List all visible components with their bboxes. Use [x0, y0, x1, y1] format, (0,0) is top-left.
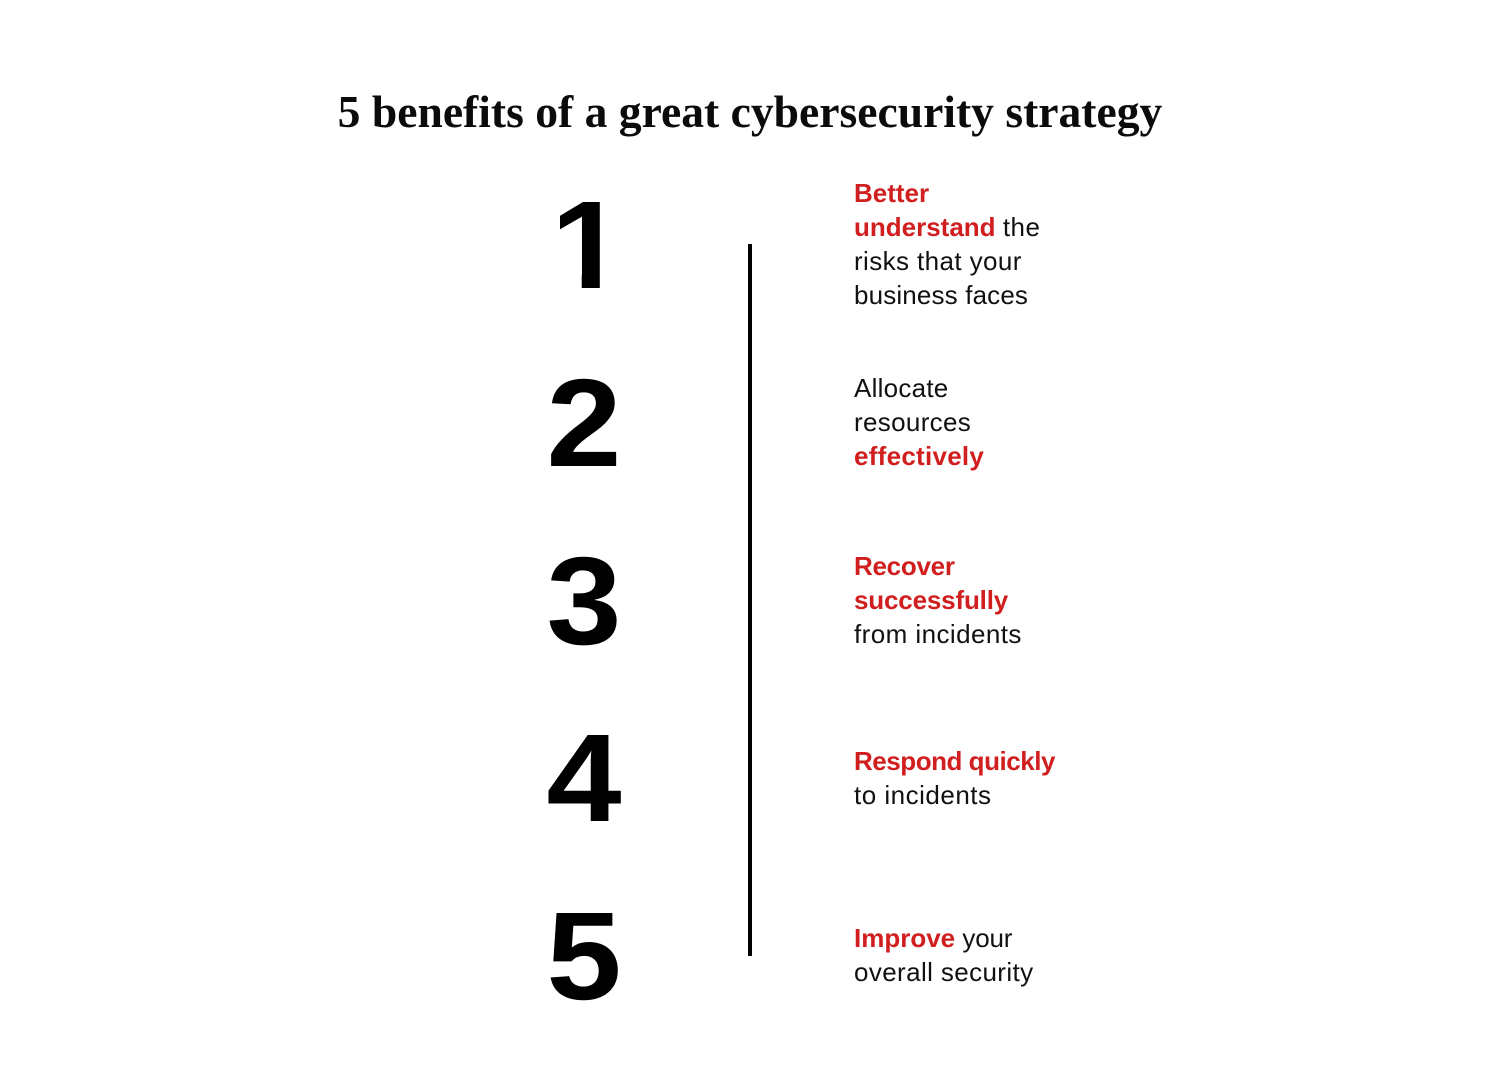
benefit 4 text: to incidents: [854, 780, 992, 810]
number 1: 1: [550, 176, 626, 315]
number 3: 3: [546, 532, 622, 671]
benefit 2 text: effectively: [854, 441, 984, 471]
number 4: 4: [546, 709, 622, 848]
vertical divider line: [748, 244, 752, 956]
number 5: 5: [546, 887, 622, 1026]
benefit 1 text: Better: [854, 178, 929, 208]
benefit 3 text: Recover: [854, 551, 955, 581]
benefit 4 text: [854, 746, 1056, 810]
benefit 3 text: successfully: [854, 585, 1008, 615]
benefit 2 text: Allocate: [854, 373, 948, 403]
benefit 1 text: [854, 178, 1040, 310]
benefit 4 text: Respond quickly: [854, 746, 1055, 776]
number 2: 2: [546, 354, 622, 493]
benefit 5 text: [854, 923, 1033, 987]
benefit 3 text: [854, 551, 1022, 649]
title: 5 benefits of a great cybersecurity strategy: [338, 86, 1162, 137]
benefit 2 text: resources: [854, 407, 971, 437]
benefit 1 text: understand the: [854, 212, 1040, 242]
benefit 3 text: from incidents: [854, 619, 1022, 649]
benefit 1 text: risks that your: [854, 246, 1022, 276]
benefit 2 text: [854, 373, 984, 471]
benefit 1 text: business faces: [854, 280, 1028, 310]
benefit 5 text: overall security: [854, 957, 1033, 987]
benefit 5 text: Improve your: [854, 923, 1012, 953]
